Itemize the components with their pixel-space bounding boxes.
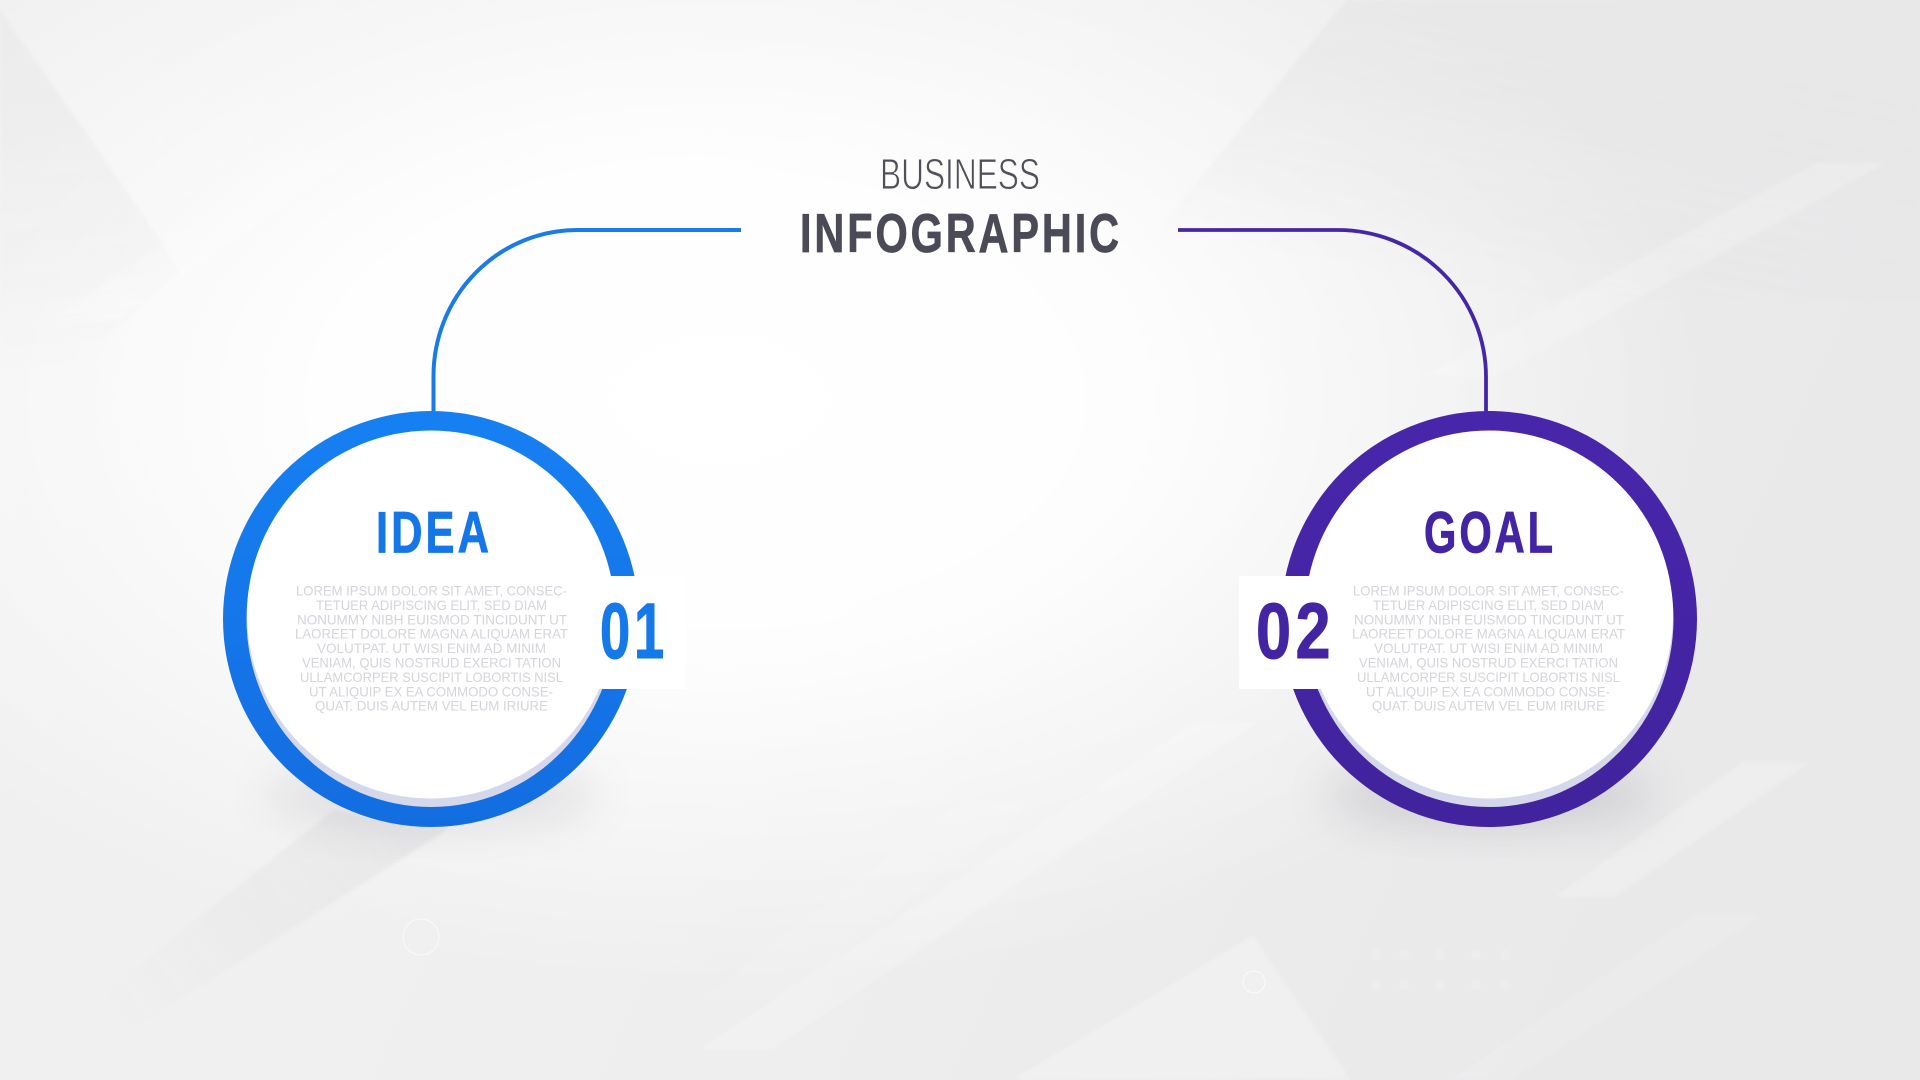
purple ring <box>1281 411 1697 827</box>
body text: ULLAMCORPER SUSCIPIT LOBORTIS NISL <box>1357 669 1620 685</box>
body text: VOLUTPAT. UT WISI ENIM AD MINIM <box>317 640 546 656</box>
white disc <box>247 430 615 798</box>
body text <box>295 582 568 714</box>
number tab <box>1239 576 1335 689</box>
connector: goal <box>1178 230 1486 412</box>
body text <box>1352 582 1625 714</box>
inner crescent <box>1304 431 1674 807</box>
number 02: 02 <box>1256 586 1335 675</box>
circle shadow <box>267 763 597 827</box>
blue ring <box>223 411 639 827</box>
body text: ULLAMCORPER SUSCIPIT LOBORTIS NISL <box>300 669 563 685</box>
body text: UT ALIQUIP EX EA COMMODO CONSE- <box>309 683 553 699</box>
title <box>800 150 1122 264</box>
title line: infographic: INFOGRAPHIC <box>800 202 1122 264</box>
body text: VOLUTPAT. UT WISI ENIM AD MINIM <box>1374 640 1603 656</box>
body text: UT ALIQUIP EX EA COMMODO CONSE- <box>1366 683 1610 699</box>
body text: VENIAM, QUIS NOSTRUD EXERCI TATION <box>302 654 561 670</box>
body text: TETUER ADIPISCING ELIT, SED DIAM <box>1373 597 1604 613</box>
number 01: 01 <box>600 586 668 675</box>
body text: NONUMMY NIBH EUISMOD TINCIDUNT UT <box>297 611 567 627</box>
inner crescent <box>246 431 616 807</box>
number tab <box>590 576 686 689</box>
white disc <box>1305 430 1673 798</box>
heading: goal: GOAL <box>1424 500 1556 566</box>
body text: LAOREET DOLORE MAGNA ALIQUAM ERAT <box>295 626 568 642</box>
body text: LAOREET DOLORE MAGNA ALIQUAM ERAT <box>1352 626 1625 642</box>
body text: LOREM IPSUM DOLOR SIT AMET, CONSEC- <box>1353 582 1624 598</box>
title line: business: BUSINESS <box>880 150 1040 199</box>
body text: QUAT. DUIS AUTEM VEL EUM IRIURE <box>315 698 548 714</box>
panel: idea <box>223 411 686 827</box>
panel: goal <box>1239 411 1697 827</box>
body text: QUAT. DUIS AUTEM VEL EUM IRIURE <box>1372 698 1605 714</box>
circle shadow <box>1325 763 1655 827</box>
body text: TETUER ADIPISCING ELIT, SED DIAM <box>316 597 547 613</box>
body text: NONUMMY NIBH EUISMOD TINCIDUNT UT <box>1354 611 1624 627</box>
connector: idea <box>434 230 741 412</box>
body text: VENIAM, QUIS NOSTRUD EXERCI TATION <box>1359 654 1618 670</box>
heading: idea: IDEA <box>376 500 492 566</box>
body text: LOREM IPSUM DOLOR SIT AMET, CONSEC- <box>296 582 567 598</box>
